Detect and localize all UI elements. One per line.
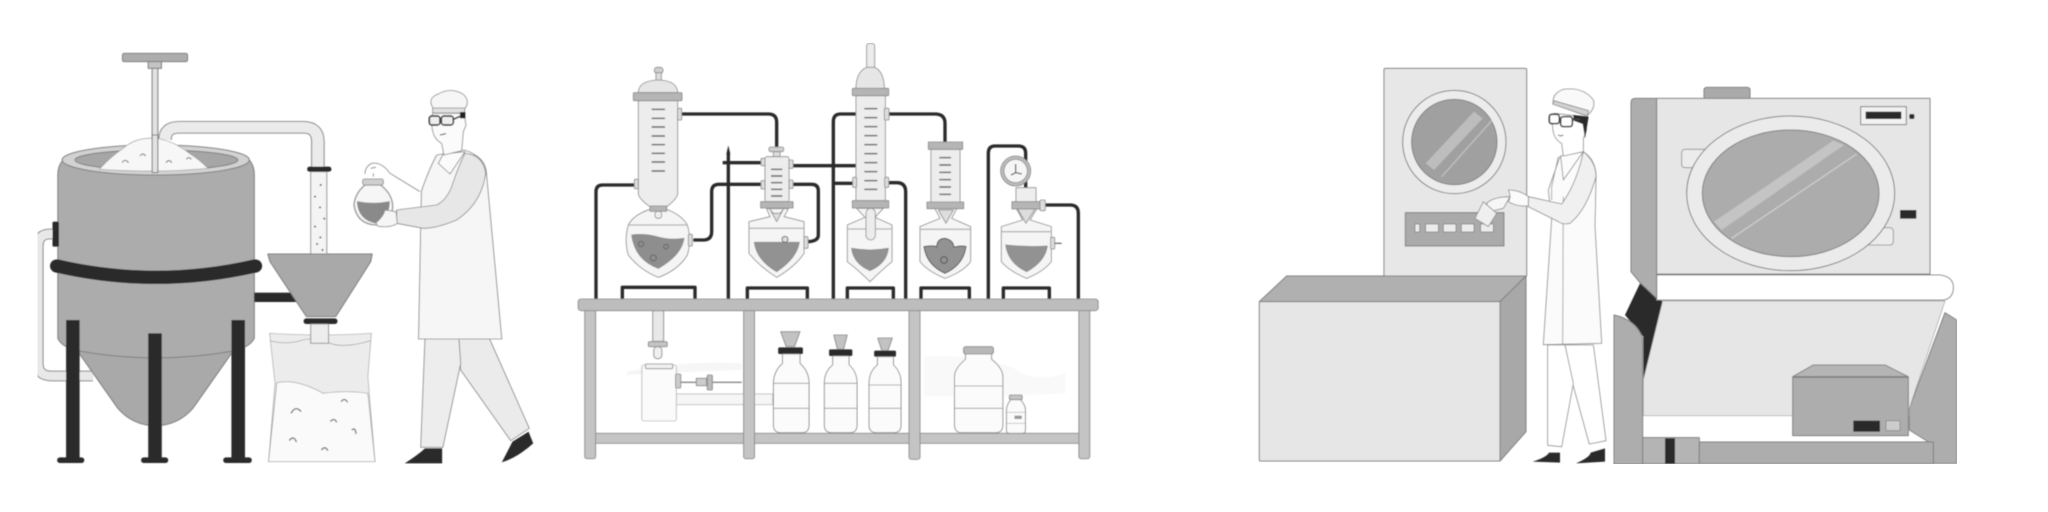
panel: fermentation tank and operator <box>38 53 533 463</box>
column 1 condenser <box>633 67 682 207</box>
goggles <box>429 116 461 125</box>
oval door <box>1687 116 1895 271</box>
sleeve <box>397 153 486 228</box>
round window <box>1403 90 1506 194</box>
lower hand <box>376 210 397 227</box>
small instrument box <box>1793 365 1908 436</box>
technician trousers <box>1548 345 1606 447</box>
funnel <box>268 254 372 324</box>
hand with card <box>1487 197 1510 212</box>
operator upper body <box>354 90 486 228</box>
raised arm line <box>390 173 420 192</box>
technician shoes <box>1533 448 1605 463</box>
flask 2 <box>749 202 808 277</box>
left support block <box>1614 315 1643 464</box>
bench and under-bench items <box>578 299 1098 459</box>
machine top bump <box>1704 87 1750 99</box>
white shelf band <box>1657 275 1953 300</box>
left glassware group: columns 1 and 2 <box>596 67 858 300</box>
face and neck <box>1553 113 1587 156</box>
tubing for columns 3 to 5 <box>847 114 1078 300</box>
technician upper body <box>1475 89 1596 227</box>
column 3 condenser <box>852 43 889 201</box>
base cabinet <box>1259 276 1526 461</box>
machine front face <box>1657 98 1930 274</box>
card <box>1475 202 1497 227</box>
raised hand <box>365 163 390 177</box>
round flask 1 <box>626 206 692 277</box>
operator coat <box>419 150 502 339</box>
column 5 head <box>1012 188 1045 211</box>
machine side face <box>1631 98 1657 298</box>
hat band <box>1553 101 1589 116</box>
neck and face <box>432 113 466 155</box>
panel: control cabinet and technician <box>1259 68 1606 463</box>
lower receiver box and piping <box>627 311 1065 421</box>
collar <box>438 152 465 174</box>
bottle 3 <box>869 338 901 433</box>
dark wedge behind machine <box>1625 283 1663 383</box>
icon: top agitator handle <box>122 53 187 142</box>
tank cone <box>77 350 234 426</box>
glasses <box>1549 114 1580 127</box>
tank legs <box>57 320 252 463</box>
coat details <box>1552 157 1563 345</box>
panel: freeze dryer machine <box>1614 87 1957 464</box>
flask <box>354 179 393 225</box>
bottle 2 <box>824 335 857 433</box>
column 2 condenser <box>761 147 793 202</box>
control panel with buttons <box>1405 213 1504 246</box>
flask 4 <box>920 202 971 278</box>
valve block <box>52 222 59 247</box>
tank body <box>58 147 254 358</box>
small vial <box>1007 395 1025 433</box>
sleeve <box>1528 152 1596 224</box>
large jar <box>955 347 1003 433</box>
collar <box>1561 152 1583 180</box>
mouth <box>1558 133 1563 137</box>
hat <box>431 90 467 110</box>
pipe: upper transfer pipe <box>165 127 318 167</box>
connecting bar <box>254 293 301 302</box>
black belt band <box>57 266 255 277</box>
display and indicators <box>1861 107 1916 219</box>
column 4 condenser <box>928 142 963 203</box>
strap block <box>460 112 465 118</box>
right support block <box>1909 313 1957 463</box>
flask 5 <box>1001 209 1062 278</box>
base rail <box>1643 438 1933 464</box>
hat <box>1553 89 1594 116</box>
hair <box>1573 115 1589 138</box>
tank rim <box>62 145 249 175</box>
tubing for columns 1 and 2 <box>596 114 858 300</box>
flask 3 <box>847 201 892 282</box>
bench frame <box>578 299 1098 459</box>
sight tube with particles <box>307 167 331 255</box>
mouth <box>440 134 446 135</box>
door hinges <box>1682 149 1893 245</box>
operator pouring flask <box>354 90 533 463</box>
powder mound in tank <box>99 135 208 173</box>
pointing hand <box>1508 190 1528 206</box>
sloped chamber panel <box>1643 301 1945 416</box>
icon: pressure gauge <box>1001 156 1031 186</box>
right glassware group: columns 3 to 5 <box>847 43 1078 300</box>
hat band <box>433 108 465 113</box>
bottle 1 <box>773 332 809 433</box>
powder bag <box>269 324 375 462</box>
panel: distillation glassware bench <box>578 43 1098 459</box>
operator shoes <box>405 432 533 463</box>
control tower <box>1384 68 1527 277</box>
technician coat <box>1543 152 1602 345</box>
technician <box>1475 89 1606 463</box>
operator trousers <box>421 338 529 447</box>
pipe: left return pipe <box>38 234 93 376</box>
